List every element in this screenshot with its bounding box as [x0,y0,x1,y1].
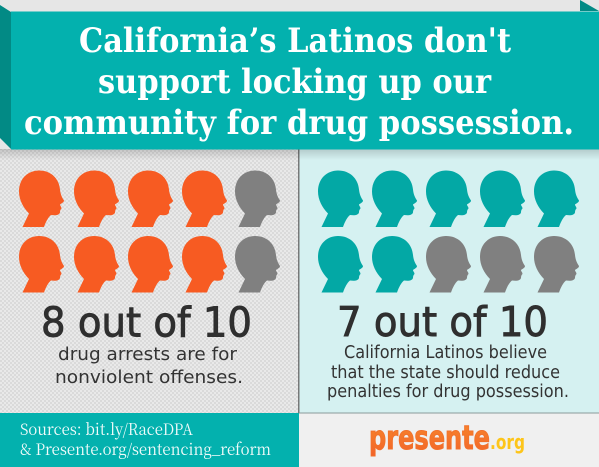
text: sources: Sources: bit.ly/RaceDPA [20,417,193,440]
logo: presente.org: presente [369,418,490,457]
banner fold: left side [0,5,11,149]
logo: presente.org: .org [490,430,525,454]
panel divider [298,149,300,413]
statistic: 7 out of 10: 7 out of 10 [337,298,548,346]
banner [11,12,599,150]
title: support locking up our [98,62,492,102]
panel: right background [299,149,599,413]
text: sources: & Presente.org/sentencing_reform [20,437,271,460]
icons: left heads, 8 of 10 orange [19,170,280,292]
statistic: 8 out of 10: 8 out of 10 [41,298,252,346]
text: left description: drug arrests are for [58,344,238,365]
panel: left background [0,149,298,413]
text: right description: that the state should reduce [331,363,560,383]
text: left description [55,344,243,388]
footer rule [299,412,599,414]
banner fold: top right corner [580,0,599,11]
icons: right heads, 7 of 10 teal [318,170,579,292]
footer: logo background [299,413,599,467]
banner shadow [0,149,599,160]
footer: sources background [0,413,299,467]
text: right description [327,343,569,402]
title [24,21,574,143]
title: California’s Latinos don't [79,21,511,61]
text: sources [20,417,271,460]
text: right description: California Latinos believe [344,343,547,363]
text: left description: nonviolent offenses. [55,367,243,388]
top strip [0,0,599,12]
text: right description: penalties for drug possession. [327,382,569,402]
